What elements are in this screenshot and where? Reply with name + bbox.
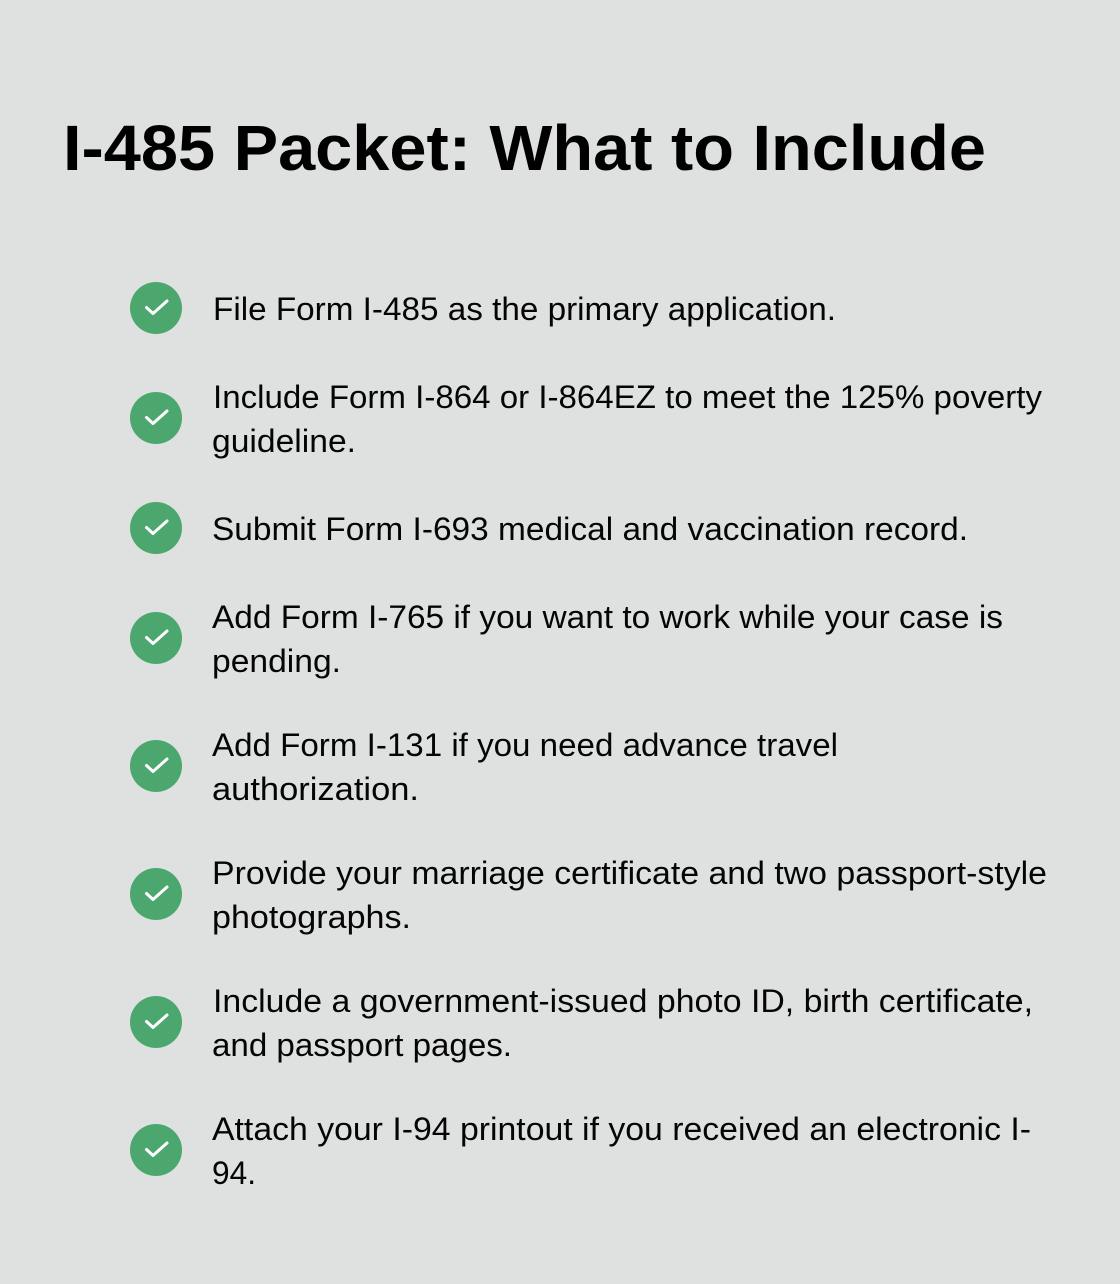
item 4 text [212,599,1003,679]
icon: check [130,1124,182,1176]
item 4 [130,599,1003,679]
item 4 text: Add Form I-765 if you want to work while your case is [212,599,1003,635]
checklist [130,282,1047,1191]
item 2 text: Include Form I-864 or I-864EZ to meet the 125% poverty [213,379,1042,415]
item 3 [130,502,968,554]
item 7 text: Include a government-issued photo ID, birth certificate, [213,983,1033,1019]
item 6 text: photographs. [212,899,411,935]
icon: check [130,502,182,554]
item 6 text: Provide your marriage certificate and two passport-style [212,855,1047,891]
item 5 [130,727,838,807]
item 5 text [212,727,838,807]
item 2 [130,379,1042,459]
item 7 [130,983,1033,1063]
item 2 text: guideline. [212,423,356,459]
icon: check [130,868,182,920]
item 8 text: Attach your I-94 printout if you received an electronic I- [212,1111,1031,1147]
item 2 text [212,379,1042,459]
item 6 [130,855,1047,935]
icon: check [130,996,182,1048]
item 1 text: File Form I-485 as the primary application. [213,291,836,327]
title: I-485 Packet: What to Include [63,112,986,184]
item 5 text: Add Form I-131 if you need advance travel [212,727,838,763]
item 8 [130,1111,1031,1191]
item 7 text: and passport pages. [212,1027,512,1063]
item 8 text: 94. [212,1155,256,1191]
item 5 text: authorization. [212,771,419,807]
item 3 text: Submit Form I-693 medical and vaccination record. [212,511,968,547]
icon: check [130,282,182,334]
item 4 text: pending. [212,643,341,679]
icon: check [130,392,182,444]
icon: check [130,740,182,792]
item 7 text [212,983,1033,1063]
item 6 text [212,855,1047,935]
icon: check [130,612,182,664]
item 1 [130,282,836,334]
item 8 text [212,1111,1031,1191]
